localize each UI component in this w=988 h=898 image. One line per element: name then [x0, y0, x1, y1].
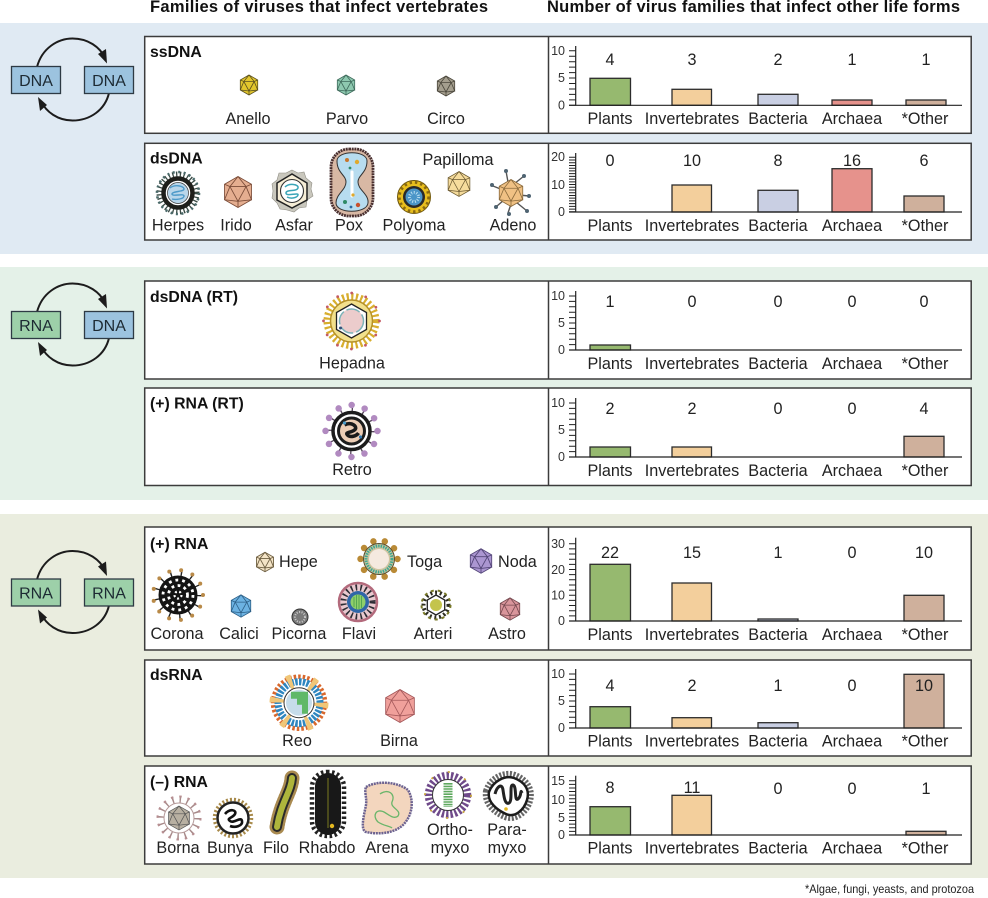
icon: Toga	[360, 540, 398, 578]
value labels: 11	[684, 779, 700, 797]
category labels: Archaea	[822, 840, 882, 858]
category labels: *Other	[902, 840, 949, 858]
value labels: 1	[773, 677, 783, 695]
label: Hepe: Hepe	[279, 553, 318, 571]
label: Bunya: Bunya	[207, 839, 253, 857]
icon: Papilloma	[448, 172, 470, 196]
icon: Hepadna	[324, 293, 380, 349]
panel: dsRNA	[145, 660, 971, 756]
y axis: 10	[551, 588, 565, 602]
label: Noda: Noda	[498, 553, 537, 571]
category labels	[588, 840, 949, 858]
value labels: 4	[605, 51, 615, 69]
icon: Retro	[326, 405, 378, 457]
bar chart: dsRNA	[551, 667, 962, 750]
panel: ssDNA	[145, 36, 971, 133]
value labels: 3	[687, 51, 697, 69]
category labels: Invertebrates	[645, 462, 739, 480]
category labels: Archaea	[822, 732, 882, 750]
icon: Parvo	[337, 75, 355, 95]
baseline	[569, 834, 962, 836]
category labels: Archaea	[822, 626, 882, 644]
bars	[590, 795, 946, 835]
value labels: 8	[773, 152, 783, 170]
label: Orthomyxo line 1: Ortho-	[427, 821, 473, 839]
value labels: 1	[773, 544, 783, 562]
label: Polyoma: Polyoma	[383, 216, 445, 234]
heading: (+) RNA: (+) RNA	[150, 536, 208, 553]
panel: (+) RNA	[145, 527, 971, 650]
y axis: 15	[551, 774, 565, 788]
value labels: 0	[605, 152, 615, 170]
y axis: 20	[551, 150, 565, 164]
y axis: 5	[558, 316, 565, 330]
heading: dsDNA: dsDNA	[150, 150, 203, 168]
value labels: 0	[847, 544, 857, 562]
icon: Orthomyxo	[425, 772, 471, 818]
icon: Circo	[437, 76, 455, 96]
label: Paramyxo line 2: myxo	[488, 839, 526, 857]
value labels: 4	[919, 400, 929, 418]
label: Astro: Astro	[488, 625, 526, 643]
baseline	[569, 456, 962, 458]
y axis: 0	[558, 205, 565, 219]
section background: RNA and DNA	[0, 267, 988, 500]
category labels	[588, 217, 949, 235]
label: Arena: Arena	[365, 839, 409, 857]
heading: (+) RNA (RT): (+) RNA (RT)	[150, 396, 244, 412]
category labels: Invertebrates	[645, 217, 739, 235]
y axis: 10	[551, 396, 565, 410]
replication diagram: RNA to DNA: RNA	[19, 318, 53, 335]
icon: Arteri	[422, 590, 450, 620]
category labels: Plants	[588, 732, 632, 750]
bar chart: dsDNA (RT)	[551, 289, 962, 373]
bars	[590, 436, 944, 457]
value labels: 0	[847, 780, 857, 798]
y axis: 5	[558, 71, 565, 85]
y axis	[551, 537, 576, 628]
y axis: 10	[551, 178, 565, 192]
value labels: 4	[605, 677, 615, 695]
icon: Bunya	[214, 800, 252, 836]
label: Corona: Corona	[150, 625, 204, 643]
label: Orthomyxo line 2: myxo	[431, 839, 469, 857]
y axis: 0	[558, 614, 565, 628]
category labels: *Other	[902, 732, 949, 750]
label: Asfar: Asfar	[275, 216, 313, 234]
category labels: *Other	[902, 217, 949, 235]
value labels: 2	[773, 51, 783, 69]
bar chart: (-) RNA	[551, 774, 962, 858]
replication diagram: DNA to DNA: DNA	[19, 73, 53, 90]
value labels: 8	[605, 779, 615, 797]
category labels: Bacteria	[748, 217, 808, 235]
label: Parvo: Parvo	[326, 110, 368, 128]
icon: Picorna	[292, 609, 308, 625]
value labels: 2	[605, 400, 615, 418]
value labels	[601, 544, 933, 562]
replication diagram: DNA to DNA: DNA	[92, 73, 126, 90]
baseline	[569, 349, 962, 351]
category labels: Archaea	[822, 355, 882, 373]
value labels: 0	[847, 293, 857, 311]
category labels	[588, 626, 949, 644]
label: Arteri: Arteri	[414, 625, 452, 643]
category labels: Invertebrates	[645, 626, 739, 644]
label: Picorna: Picorna	[272, 625, 326, 643]
value labels: 15	[683, 544, 701, 562]
value labels: 10	[915, 677, 933, 695]
icon: Paramyxo	[486, 774, 531, 818]
value labels: 16	[843, 152, 861, 170]
baseline	[569, 104, 962, 106]
category labels: Invertebrates	[645, 110, 739, 128]
baseline	[569, 620, 962, 622]
heading: dsRNA: dsRNA	[150, 667, 203, 684]
category labels: Invertebrates	[645, 732, 739, 750]
value labels: 2	[687, 400, 697, 418]
icon: Birna	[386, 690, 414, 722]
bars	[590, 674, 944, 728]
category labels	[588, 355, 949, 373]
category labels: Bacteria	[748, 840, 808, 858]
icon: Anello	[240, 75, 258, 95]
category labels: Invertebrates	[645, 355, 739, 373]
icon: Corona	[153, 570, 203, 620]
value labels: 0	[847, 677, 857, 695]
category labels: Plants	[588, 355, 632, 373]
value labels	[605, 152, 929, 170]
replication diagram: RNA to RNA: RNA	[19, 586, 53, 602]
panel: dsDNA (RT)	[145, 281, 971, 379]
icon: Herpes	[157, 172, 199, 214]
icon: Arena	[363, 783, 412, 833]
label: Calici: Calici	[219, 625, 259, 643]
footnote: *Algae, fungi, yeasts, and protozoa	[805, 882, 974, 896]
category labels: Archaea	[822, 217, 882, 235]
value labels: 0	[773, 293, 783, 311]
icon: Borna	[158, 796, 200, 840]
section background: RNA to RNA	[0, 514, 988, 878]
y axis	[551, 774, 576, 842]
replication diagram: DNA to DNA	[12, 38, 134, 120]
bar chart: ssDNA	[551, 44, 962, 128]
value labels	[605, 293, 929, 311]
icon: Hepe	[256, 552, 274, 572]
icon: Irido	[225, 176, 251, 208]
label: Irido: Irido	[220, 216, 252, 234]
icon: Rhabdo	[312, 772, 344, 836]
bars	[590, 78, 946, 105]
label: Papilloma: Papilloma	[422, 151, 494, 169]
category labels: *Other	[902, 110, 949, 128]
bars	[590, 564, 944, 621]
value labels: 10	[683, 152, 701, 170]
category labels	[588, 462, 949, 480]
y axis: 0	[558, 828, 565, 842]
value labels: 0	[919, 293, 929, 311]
replication diagram: RNA to DNA	[12, 284, 134, 366]
category labels: *Other	[902, 626, 949, 644]
icon: Filo	[277, 778, 292, 827]
icon: Polyoma	[398, 180, 430, 214]
bars	[672, 169, 944, 212]
value labels: 10	[915, 544, 933, 562]
panel: (+) RNA (RT)	[145, 388, 971, 486]
category labels: Bacteria	[748, 355, 808, 373]
label: Adeno: Adeno	[490, 216, 536, 234]
baseline	[569, 211, 962, 213]
label: Retro: Retro	[332, 461, 372, 479]
y axis: 0	[558, 450, 565, 464]
label: Flavi: Flavi	[342, 625, 376, 643]
y axis	[551, 289, 576, 357]
label: Rhabdo: Rhabdo	[299, 839, 355, 857]
value labels: 22	[601, 544, 619, 562]
y axis: 10	[551, 44, 565, 58]
y axis: 0	[558, 343, 565, 357]
icon: Calici	[231, 595, 251, 617]
category labels: Plants	[588, 626, 632, 644]
value labels	[605, 400, 929, 418]
icon: Flavi	[339, 583, 377, 621]
category labels	[588, 732, 949, 750]
category labels: Plants	[588, 217, 632, 235]
replication diagram: RNA to DNA: DNA	[92, 318, 126, 335]
label: Borna: Borna	[156, 839, 200, 857]
value labels: 1	[605, 293, 615, 311]
value labels	[605, 779, 931, 798]
value labels: 0	[773, 780, 783, 798]
bar chart: dsDNA	[551, 150, 962, 235]
y axis: 0	[558, 98, 565, 112]
icon: Noda	[470, 549, 492, 573]
label: Anello: Anello	[226, 110, 270, 128]
y axis	[551, 150, 576, 219]
replication diagram: RNA to RNA: RNA	[92, 586, 126, 602]
label: Filo: Filo	[263, 839, 289, 857]
replication diagram: RNA to RNA	[12, 551, 134, 633]
label: Hepadna: Hepadna	[319, 354, 385, 372]
y axis: 5	[558, 694, 565, 708]
bars	[590, 345, 630, 350]
value labels: 1	[847, 51, 857, 69]
y axis	[551, 396, 576, 464]
y axis	[551, 667, 576, 735]
label: Birna: Birna	[380, 732, 418, 750]
icon: Pox	[331, 149, 373, 216]
category labels: Plants	[588, 840, 632, 858]
value labels: 6	[919, 152, 929, 170]
category labels: Archaea	[822, 110, 882, 128]
bar chart: (+) RNA (RT)	[551, 396, 962, 480]
y axis: 5	[558, 811, 565, 825]
value labels: 2	[687, 677, 697, 695]
category labels: Bacteria	[748, 626, 808, 644]
value labels: 0	[687, 293, 697, 311]
y axis	[551, 44, 576, 112]
y axis: 10	[551, 667, 565, 681]
y axis: 10	[551, 793, 565, 807]
section background: DNA to DNA	[0, 23, 988, 254]
y axis: 30	[551, 537, 565, 551]
category labels: Plants	[588, 110, 632, 128]
value labels	[605, 51, 931, 69]
icon: Adeno	[490, 169, 531, 216]
category labels: Bacteria	[748, 732, 808, 750]
bar chart: (+) RNA	[551, 537, 962, 644]
icon: Asfar	[272, 170, 313, 212]
heading: dsDNA (RT): dsDNA (RT)	[150, 289, 238, 306]
y axis: 10	[551, 289, 565, 303]
panel: (-) RNA	[145, 766, 971, 864]
icon: Astro	[500, 598, 520, 620]
label: Circo: Circo	[427, 110, 465, 128]
category labels: *Other	[902, 462, 949, 480]
y axis: 5	[558, 423, 565, 437]
icon: Reo	[273, 677, 325, 729]
category labels: Plants	[588, 462, 632, 480]
panel: dsDNA	[145, 143, 971, 240]
label: Pox: Pox	[335, 216, 363, 234]
baseline	[569, 727, 962, 729]
category labels: Archaea	[822, 462, 882, 480]
label: Herpes: Herpes	[152, 216, 204, 234]
value labels	[605, 677, 933, 695]
category labels: Invertebrates	[645, 840, 739, 858]
value labels: 1	[921, 780, 931, 798]
heading: ssDNA: ssDNA	[150, 44, 202, 61]
category labels: Bacteria	[748, 462, 808, 480]
label: Reo: Reo	[282, 732, 312, 750]
value labels: 1	[921, 51, 931, 69]
label: Toga: Toga	[407, 553, 442, 571]
value labels: 0	[847, 400, 857, 418]
category labels: Bacteria	[748, 110, 808, 128]
value labels: 0	[773, 400, 783, 418]
y axis: 0	[558, 721, 565, 735]
category labels	[588, 110, 949, 128]
heading: (-) RNA: (–) RNA	[150, 774, 208, 791]
y axis: 20	[551, 563, 565, 577]
label: Paramyxo line 1: Para-	[487, 821, 527, 839]
category labels: *Other	[902, 355, 949, 373]
